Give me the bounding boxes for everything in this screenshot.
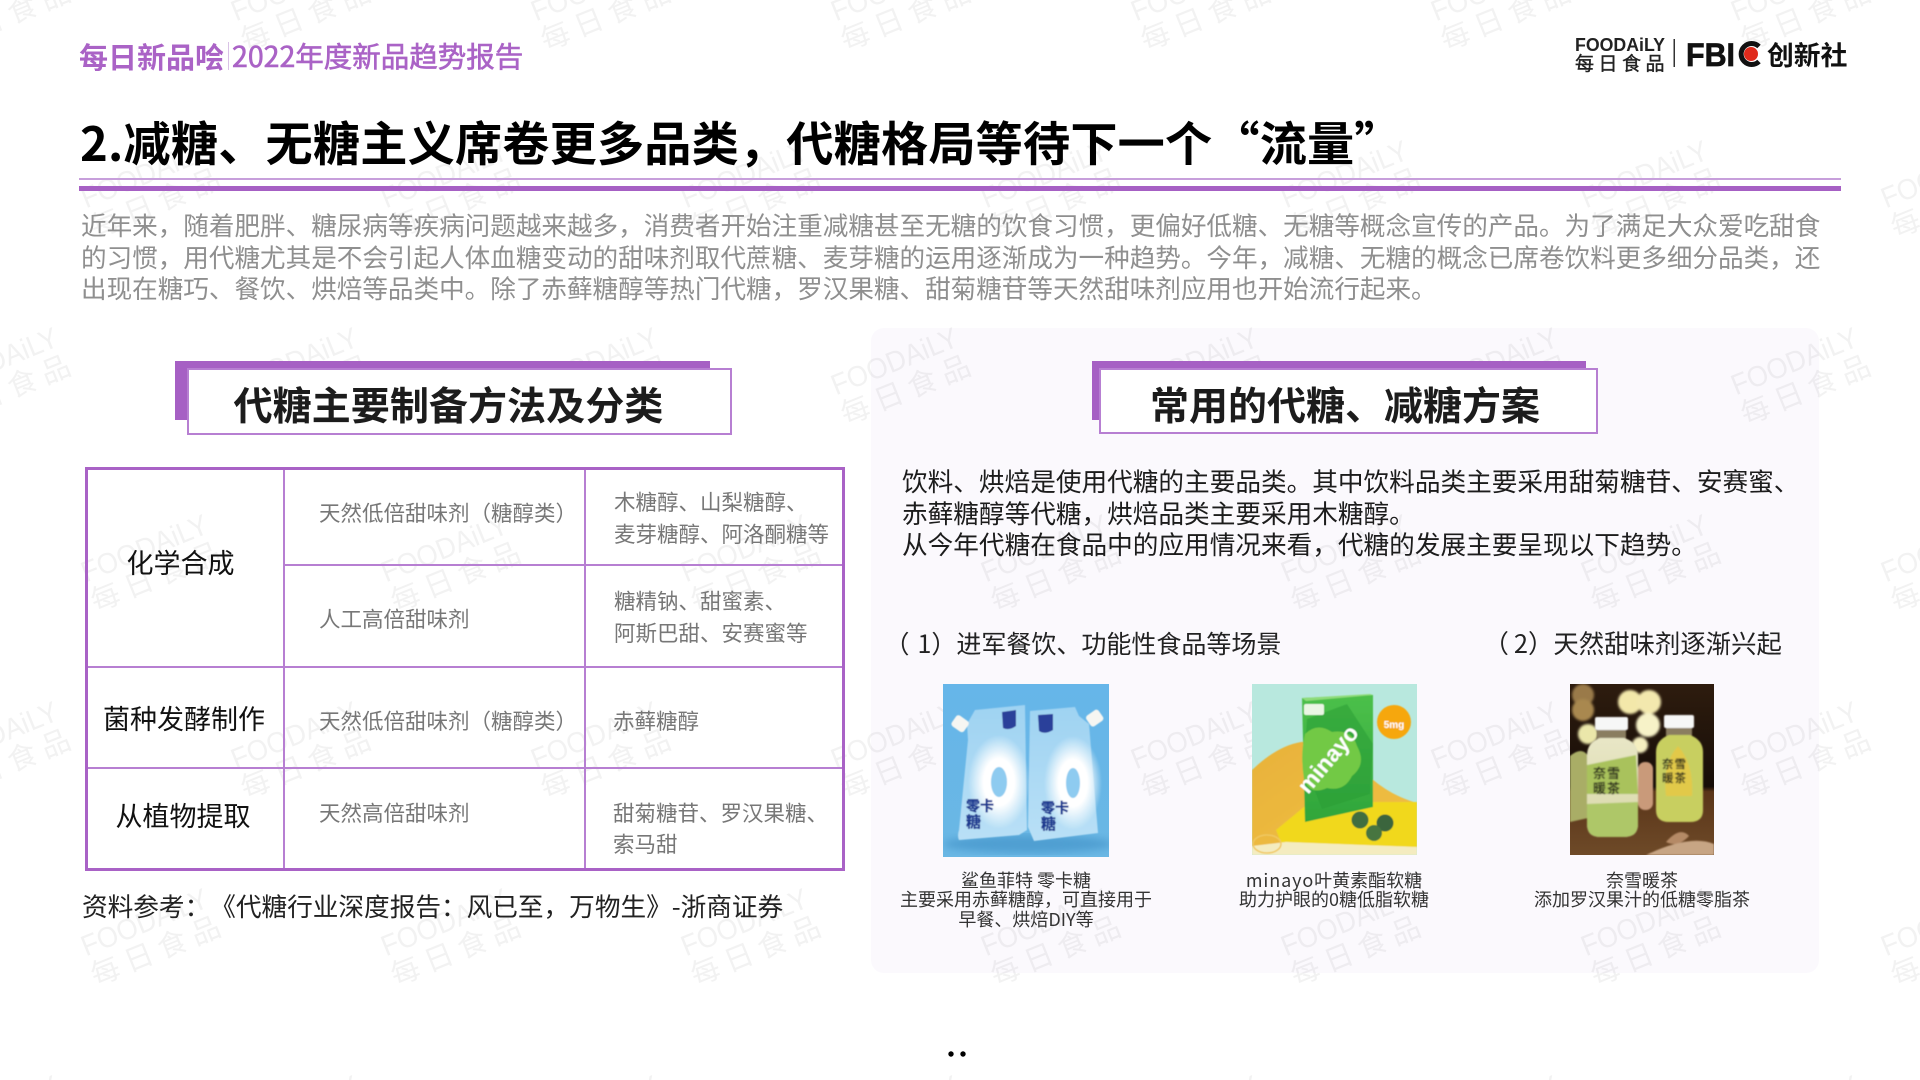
header: report name: 2022年度新品趋势报告: [232, 35, 523, 76]
row: fermentation: 赤藓糖醇: [613, 705, 699, 736]
photo: sugar pouches: 糖: [1041, 813, 1056, 834]
subheading: trend 2: （2）天然甜味剂逐渐兴起: [1484, 625, 1782, 661]
row: chemical synthesis: 木糖醇、山梨糖醇、: [614, 486, 808, 517]
caption: Shark Feite zero-calorie sugar: 鲨鱼菲特 零卡糖: [961, 866, 1091, 892]
logo: FOODAiLY and FBIC: FBI: [1686, 37, 1735, 73]
header: report name: [79, 35, 523, 77]
caption: Naixue warm tea: 添加罗汉果汁的低糖零脂茶: [1534, 886, 1750, 912]
row: chemical synthesis: 麦芽糖醇、阿洛酮糖等: [614, 518, 829, 549]
row: fermentation: [103, 698, 699, 737]
photo: Naixue warm tea bottles: 奈雪: [1593, 763, 1621, 782]
caption: minayo gummies: 助力护眼的0糖低脂软糖: [1239, 886, 1429, 912]
photo: minayo gummies: [1252, 684, 1417, 855]
logo: FOODAiLY and FBIC: 创新社: [1767, 34, 1847, 73]
intro paragraph: [81, 206, 1820, 306]
right heading: 常用的代糖、减糖方案: [1150, 376, 1540, 432]
panel: right background: [871, 328, 1819, 973]
row: chemical synthesis: 人工高倍甜味剂: [319, 603, 470, 634]
photo: Naixue warm tea bottles: 奈雪: [1662, 756, 1687, 772]
row: plant extraction: [116, 795, 828, 859]
caption: Naixue warm tea: [1534, 866, 1750, 912]
caption: Shark Feite zero-calorie sugar: 早餐、烘焙DIY等: [958, 906, 1094, 932]
right intro paragraph: 饮料、烘焙是使用代糖的主要品类。其中饮料品类主要采用甜菊糖苷、安赛蜜、: [902, 462, 1799, 499]
right heading: [1092, 361, 1598, 434]
left heading: 代糖主要制备方法及分类: [234, 376, 663, 432]
logo: FOODAiLY and FBIC: 每日食品: [1575, 49, 1669, 76]
title underline: [79, 178, 1841, 191]
right intro paragraph: [902, 462, 1799, 562]
title: 2.减糖、无糖主义席卷更多品类，代糖格局等待下一个“流量”: [80, 106, 1402, 175]
intro paragraph: 的习惯，用代糖尤其是不会引起人体血糖变动的甜味剂取代蔗糖、麦芽糖的运用逐渐成为一种趋势。今年，减糖、无糖的概念已席卷饮料更多细分品类，还: [81, 238, 1820, 275]
photo: Naixue warm tea bottles: [1570, 684, 1714, 855]
row: fermentation: 菌种发酵制作: [103, 698, 265, 737]
photo: minayo gummies: 5mg: [1384, 720, 1404, 731]
row: plant extraction: 天然高倍甜味剂: [319, 797, 470, 828]
row: chemical synthesis: 天然低倍甜味剂（糖醇类）: [319, 497, 577, 528]
right intro paragraph: 从今年代糖在食品中的应用情况来看，代糖的发展主要呈现以下趋势。: [902, 525, 1697, 562]
photo: Naixue warm tea bottles: 暖茶: [1662, 770, 1687, 786]
right intro paragraph: 赤藓糖醇等代糖，烘焙品类主要采用木糖醇。: [902, 494, 1415, 530]
logo: FOODAiLY and FBIC: [1575, 34, 1847, 76]
intro paragraph: 近年来，随着肥胖、糖尿病等疾病问题越来越多，消费者开始注重减糖甚至无糖的饮食习惯，更偏好低糖、无糖等概念宣传的产品。为了满足大众爱吃甜食: [81, 206, 1820, 243]
row: chemical synthesis: 阿斯巴甜、安赛蜜等: [614, 617, 808, 648]
row: plant extraction: 甜菊糖苷、罗汉果糖、: [613, 797, 828, 828]
subheading: trend 1: （1）进军餐饮、功能性食品等场景: [884, 625, 1281, 661]
photo: Naixue warm tea bottles: 暖茶: [1593, 778, 1621, 797]
photo: minayo gummies: minayo: [1292, 720, 1364, 798]
caption: Shark Feite zero-calorie sugar: 主要采用赤藓糖醇，可直接用于: [900, 886, 1152, 912]
intro paragraph: 出现在糖巧、餐饮、烘焙等品类中。除了赤藓糖醇等热门代糖，罗汉果糖、甜菊糖苷等天然甜味剂应用也开始流行起来。: [81, 269, 1437, 306]
logo: FOODAiLY and FBIC: FOODAiLY: [1575, 34, 1666, 55]
caption: Naixue warm tea: 奈雪暖茶: [1606, 866, 1678, 892]
left heading: [175, 361, 732, 435]
photo: sugar pouches: 零卡: [1041, 798, 1069, 818]
caption: Shark Feite zero-calorie sugar: [900, 866, 1152, 932]
row: chemical synthesis: 糖精钠、甜蜜素、: [614, 585, 786, 616]
header: report name: 每日新品哙: [79, 35, 224, 77]
row: chemical synthesis: 化学合成: [126, 542, 234, 581]
photo: sugar pouches: [943, 684, 1109, 857]
photo: sugar pouches: 糖: [966, 811, 981, 832]
caption: minayo gummies: minayo叶黄素酯软糖: [1246, 866, 1422, 892]
row: fermentation: 天然低倍甜味剂（糖醇类）: [319, 705, 577, 736]
page dots: [948, 1051, 966, 1057]
table: sweetener preparation methods: [85, 467, 845, 871]
row: chemical synthesis: [126, 486, 829, 648]
source note: 资料参考：《代糖行业深度报告：风已至，万物生》-浙商证券: [82, 886, 783, 924]
caption: minayo gummies: [1239, 866, 1429, 912]
row: plant extraction: 从植物提取: [116, 795, 250, 834]
photo: sugar pouches: 零卡: [966, 796, 994, 816]
row: plant extraction: 索马甜: [613, 828, 678, 859]
